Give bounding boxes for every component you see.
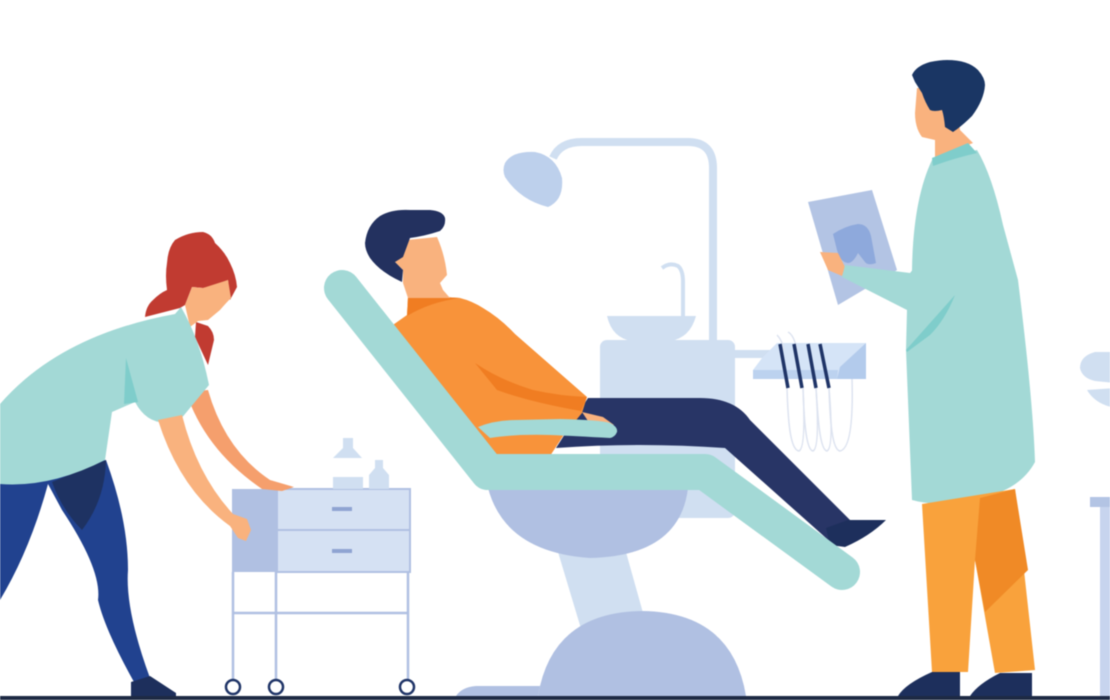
patient head <box>365 210 450 298</box>
patient torso <box>390 297 587 456</box>
x-ray sheet <box>808 190 897 305</box>
right edge lamp and cabinet <box>1080 352 1110 696</box>
dental chair <box>342 288 842 572</box>
dentist shoes <box>898 672 1032 696</box>
dentist arm and hand <box>820 252 960 315</box>
chair base <box>456 488 746 696</box>
assistant scrubs <box>0 307 209 484</box>
chair armrest and patient hand <box>478 412 617 438</box>
dentist coat <box>906 150 1035 504</box>
assistant trolley <box>226 438 414 694</box>
instrument tray <box>753 332 866 451</box>
assistant hair and ponytail <box>145 232 237 365</box>
assistant front arm <box>158 415 251 541</box>
dentist head <box>912 60 985 166</box>
floor line <box>0 696 1110 700</box>
patient legs <box>556 398 886 547</box>
dentist trousers <box>922 489 1035 673</box>
spittoon and unit <box>600 264 775 518</box>
assistant back arm <box>186 390 294 491</box>
dental lamp <box>504 142 713 345</box>
assistant face <box>185 280 231 327</box>
assistant trousers <box>0 460 176 696</box>
